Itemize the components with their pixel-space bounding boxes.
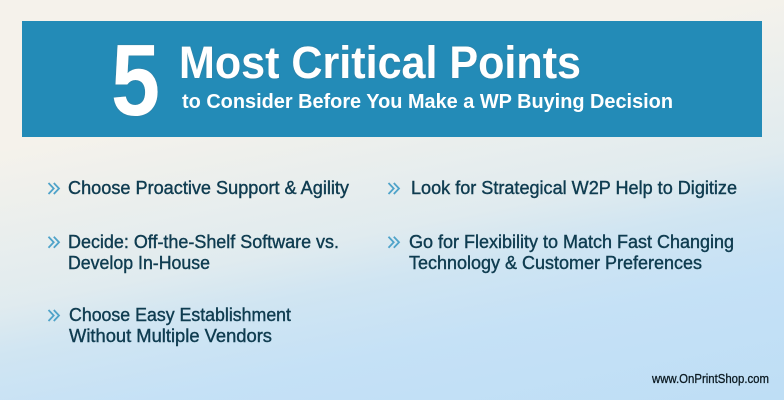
point: easy establishment: Without Multiple Vendors (69, 326, 272, 346)
point: easy establishment: Choose Easy Establishment (69, 305, 291, 325)
subtitle: to Consider Before You Make a WP Buying Decision (182, 91, 673, 113)
panel: title banner (22, 21, 762, 137)
point: off-the-shelf vs in-house: Develop In-House (68, 253, 210, 273)
point: flexibility: Go for Flexibility to Match Fast Changing (409, 232, 734, 252)
title: Most Critical Points (179, 37, 581, 88)
big number 5: 5 (111, 25, 160, 137)
point: flexibility (388, 232, 734, 273)
website url: www.OnPrintShop.com (651, 371, 769, 386)
point: off-the-shelf vs in-house (48, 232, 339, 273)
point: proactive support: Choose Proactive Support & Agility (68, 178, 350, 198)
point: easy establishment (48, 305, 291, 346)
point: off-the-shelf vs in-house: Decide: Off-the-Shelf Software vs. (68, 232, 339, 252)
point: strategical W2P help: Look for Strategical W2P Help to Digitize (411, 178, 737, 198)
point: flexibility: Technology & Customer Preferences (409, 253, 702, 273)
